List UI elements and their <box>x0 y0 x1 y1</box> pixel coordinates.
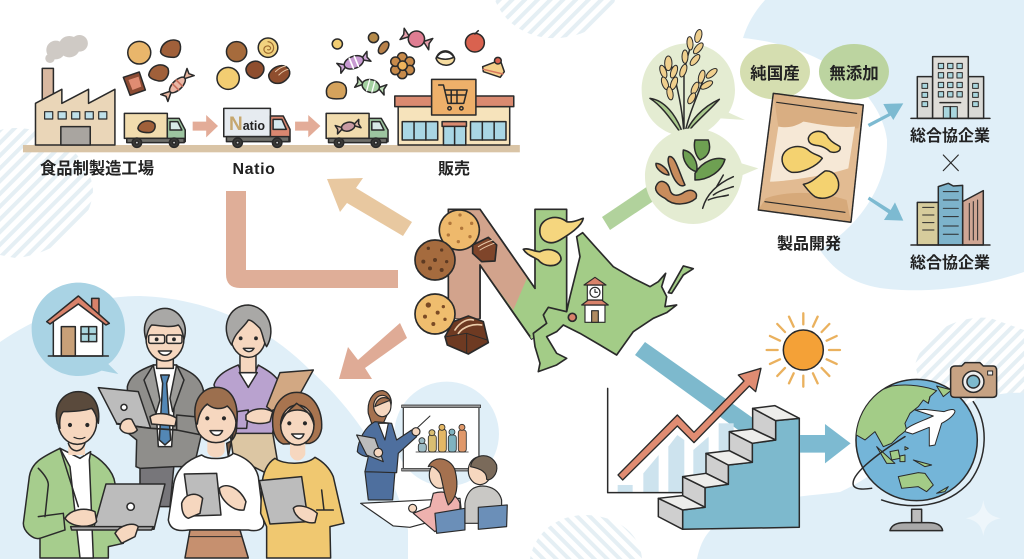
badge: 純国産 <box>740 44 810 99</box>
scene: presentation <box>357 382 507 533</box>
bubble: ingredients <box>645 128 758 224</box>
arrow: to globe <box>800 424 851 463</box>
icon: cookies and chocolates <box>415 210 497 354</box>
icon: truck 3 <box>326 113 388 147</box>
ground bar <box>23 145 520 152</box>
icon: clipboard <box>267 370 313 411</box>
icon: wheat <box>650 29 719 137</box>
icon: cross mark <box>943 155 958 171</box>
icon: clock tower <box>582 277 608 322</box>
icon: skyscrapers <box>911 183 990 245</box>
arrow: to company B <box>868 197 903 221</box>
person: woman in yellow <box>259 392 344 558</box>
flight path <box>853 437 905 489</box>
arrow: green to product <box>602 186 655 230</box>
icon: snack bag <box>758 93 863 222</box>
marker: Sapporo <box>568 313 576 321</box>
section: supply chain top <box>23 26 520 152</box>
icon: projection screen <box>402 405 481 471</box>
section: product development <box>642 29 990 245</box>
label: 純国産: 純国産 <box>750 64 800 83</box>
icon: man laptop <box>65 484 165 543</box>
person: man in green <box>23 392 165 558</box>
section: community people <box>23 283 507 558</box>
decor: sparkle <box>966 500 1001 536</box>
icon: meeting table <box>361 498 462 527</box>
arrow: to company A <box>868 103 903 127</box>
arrow: L-shaped return <box>226 191 398 288</box>
icon: house <box>47 296 109 356</box>
icon: stairs <box>658 406 799 529</box>
label: 無添加: 無添加 <box>829 64 879 83</box>
truck logo: Natio: Natio <box>229 114 265 135</box>
icon: right tablet <box>259 477 308 524</box>
bubble: home <box>32 283 125 376</box>
icon: camera <box>951 363 997 397</box>
badge: 無添加 <box>819 44 889 99</box>
label: 総合協企業 A: 総合協企業 <box>910 126 990 145</box>
person: presenter <box>357 391 430 500</box>
icon: globe <box>853 363 997 531</box>
arrow: to community <box>339 323 407 379</box>
chart: growth bars <box>608 388 734 493</box>
icon: sweets group 3 <box>326 26 504 99</box>
arrow: to Natio <box>193 115 218 137</box>
icon: sweets group 2 <box>217 38 290 89</box>
person: audience man <box>465 456 507 529</box>
icon: airplane <box>905 409 955 446</box>
arrow: growth line <box>618 368 761 480</box>
icon: ginger and herbs <box>656 140 733 208</box>
icon: truck 2 Natio <box>224 108 290 147</box>
icon: tablet <box>184 473 221 516</box>
icon: sweets group 1 <box>123 40 194 101</box>
label: Natio: Natio <box>232 161 276 178</box>
arrow: teal band to stairs <box>635 342 770 440</box>
label: 総合協企業 B: 総合協企業 <box>910 253 990 272</box>
icon: shop <box>395 79 514 145</box>
icon: factory <box>35 35 115 145</box>
label: 販売: 販売 <box>438 160 470 178</box>
person: audience woman <box>409 459 465 533</box>
arrow: to sales <box>295 115 320 137</box>
person: suit man <box>127 308 203 507</box>
icon: truck 1 <box>124 113 185 147</box>
icon: office building <box>911 57 990 118</box>
letter N <box>448 209 567 339</box>
map: Hokkaido <box>530 233 693 372</box>
label: 製品開発: 製品開発 <box>777 235 841 253</box>
person: woman in white <box>168 387 264 558</box>
icon: sun <box>767 313 840 387</box>
logo: N and Hokkaido <box>415 209 693 372</box>
label: 食品制製造工場: 食品制製造工場 <box>40 159 154 178</box>
bubble: grain <box>642 29 745 137</box>
person: older woman <box>214 305 313 473</box>
icon: potato chips <box>523 217 583 266</box>
arrow: tan to supply chain <box>327 178 412 236</box>
icon: suit man laptop <box>98 388 202 435</box>
section: growth and global <box>608 313 1001 536</box>
